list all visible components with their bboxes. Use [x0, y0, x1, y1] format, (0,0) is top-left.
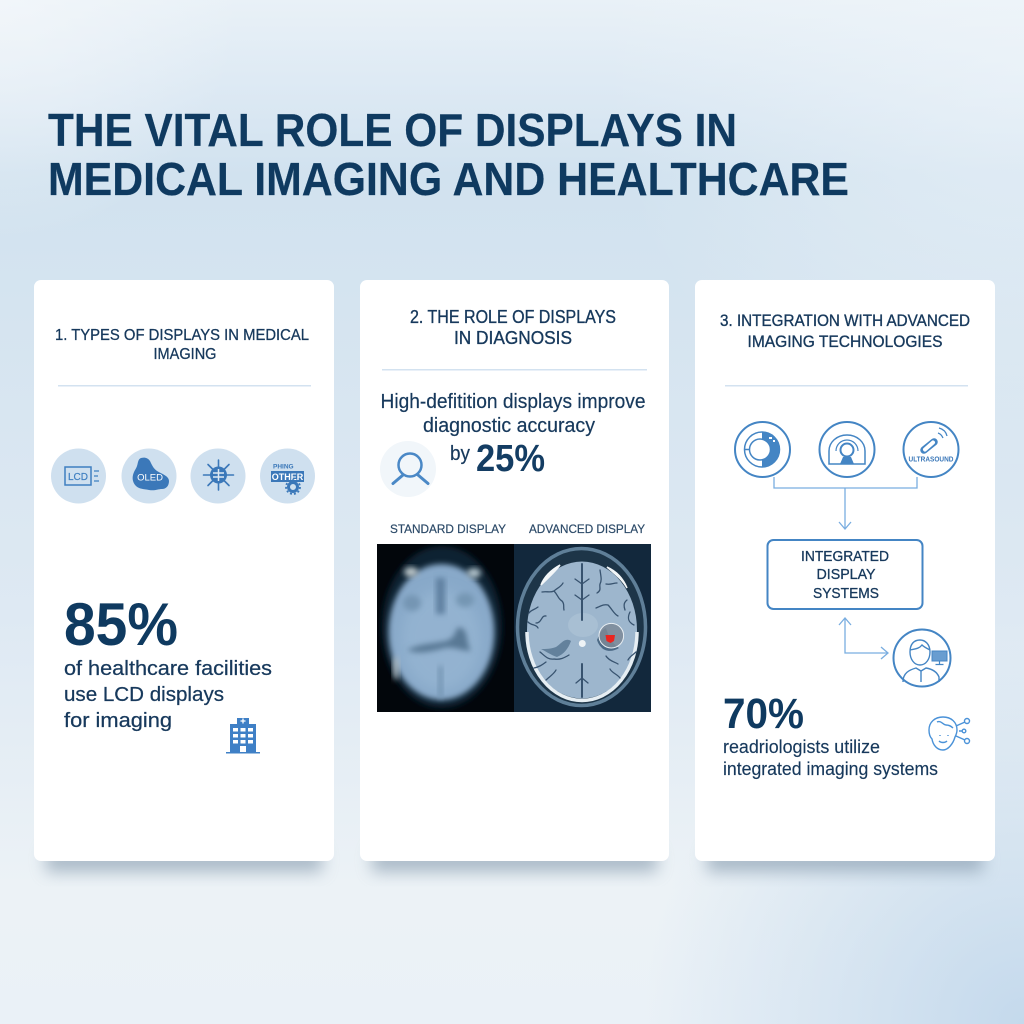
image: standard blurred scan [377, 544, 514, 712]
icon: LCD: LCD [68, 472, 88, 483]
icon: ultrasound [904, 422, 958, 477]
stat 25%: 25% [476, 438, 545, 480]
card shadows [46, 848, 983, 872]
title: MEDICAL IMAGING AND HEALTHCARE [48, 153, 849, 205]
claim text: by [450, 443, 470, 465]
integrated display systems box: INTEGRATED [801, 549, 889, 565]
icon: head with network [929, 717, 970, 750]
icon: magnifier [380, 441, 436, 497]
integrated display systems box: DISPLAY [816, 567, 876, 583]
icon: OLED: OLED [137, 472, 163, 484]
stat 85%: 85% [64, 591, 178, 658]
stat description: use LCD displays [64, 683, 224, 706]
panel 1 heading [55, 327, 309, 363]
panel 1 heading: 1. TYPES OF DISPLAYS IN MEDICAL [55, 327, 309, 344]
stat description [723, 737, 938, 779]
title: THE VITAL ROLE OF DISPLAYS IN [48, 104, 737, 156]
stat description: for imaging [64, 709, 172, 732]
claim text: High-defitition displays improve [380, 391, 646, 413]
panel 2 heading: 2. THE ROLE OF DISPLAYS [410, 307, 616, 327]
panel 1 heading: IMAGING [154, 346, 216, 363]
integrated display systems box [768, 540, 922, 609]
panel 3 heading: IMAGING TECHNOLOGIES [748, 333, 942, 351]
integrated display systems box: SYSTEMS [813, 586, 879, 602]
icon: other: OTHER [272, 472, 304, 482]
panel 2 heading: IN DIAGNOSIS [454, 328, 572, 348]
arrows into integrated box [774, 477, 917, 529]
panel 3 heading [720, 312, 970, 351]
icon: third display type [190, 448, 246, 504]
icon: radiologist [894, 630, 950, 686]
stat description: integrated imaging systems [723, 759, 938, 779]
icon: other: PHING [273, 464, 294, 470]
stat description: of healthcare facilities [64, 657, 272, 680]
panel 3 heading: 3. INTEGRATION WITH ADVANCED [720, 312, 970, 330]
icon: OLED [122, 448, 176, 504]
claim text [380, 391, 646, 465]
title [48, 104, 849, 205]
panel: types of displays [34, 280, 334, 861]
stat description [64, 657, 272, 732]
icon: CT [735, 422, 790, 477]
image: advanced sharp scan [514, 544, 651, 712]
icon: MRI [820, 422, 874, 477]
comparison labels [390, 522, 645, 536]
comparison labels: STANDARD DISPLAY [390, 522, 506, 536]
icon: LCD [51, 448, 106, 504]
icon: ultrasound: ULTRASOUND [908, 454, 954, 464]
feedback arrow [839, 618, 888, 659]
icon: hospital [226, 718, 260, 754]
panel: integration [695, 280, 995, 861]
comparison labels: ADVANCED DISPLAY [529, 522, 645, 536]
icon: other [260, 448, 315, 504]
stat 70%: 70% [723, 690, 804, 738]
stat description: readriologists utilize [723, 737, 880, 757]
panel: role in diagnosis [360, 280, 669, 861]
claim text: diagnostic accuracy [423, 415, 595, 437]
panel 2 heading [410, 307, 616, 348]
